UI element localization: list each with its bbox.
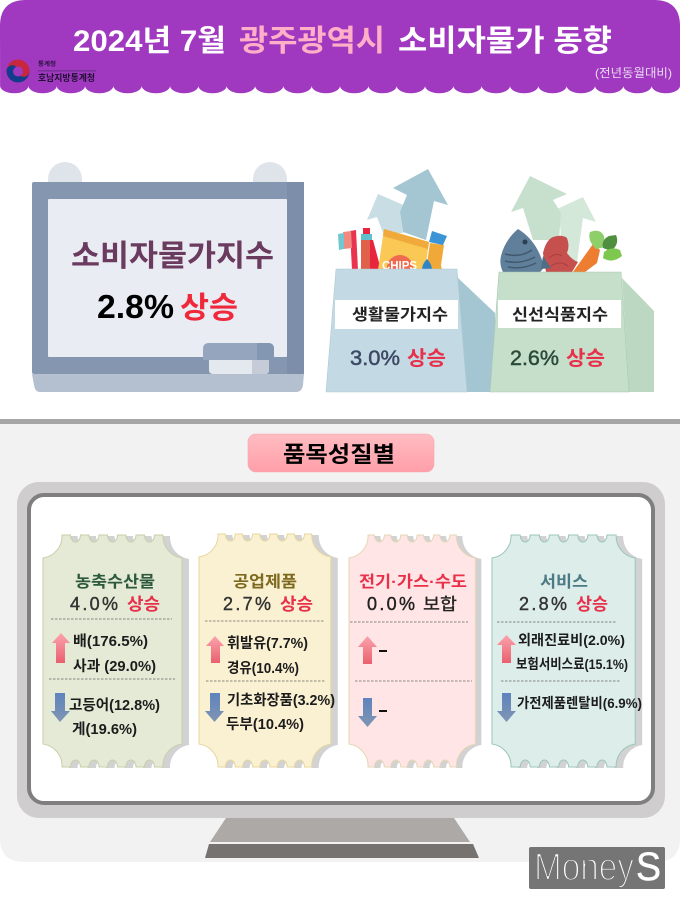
- category value: 0.0%: [367, 594, 415, 614]
- value: 2.8% up: [97, 288, 238, 325]
- panel: fresh food index bag: [490, 176, 654, 392]
- icon: up arrow: [497, 635, 516, 663]
- falling item: 가전제품렌탈비(6.9%): [517, 695, 642, 711]
- category value: 2.8%: [519, 594, 567, 614]
- value: 2.6% up: [510, 347, 605, 370]
- category title: 서비스: [540, 573, 588, 591]
- falling items: 두부(10.4%): [226, 716, 304, 733]
- title: 소비자물가 동향: [398, 25, 612, 58]
- value: 2.6% up: 2.6%: [510, 347, 559, 370]
- icon: down arrow: [497, 693, 516, 722]
- monitor illustration: [17, 482, 665, 858]
- falling items: 고등어(12.8%): [69, 697, 160, 714]
- label box: [498, 300, 621, 328]
- rising items: 외래진료비(2.0%): [518, 632, 625, 648]
- icon: household goods: [338, 228, 447, 269]
- category title: 농축수산물: [75, 573, 155, 591]
- category value: [367, 594, 457, 614]
- falling items: 기초화장품(3.2%): [227, 692, 335, 709]
- label box: [335, 300, 458, 329]
- rising items: none: [379, 650, 387, 652]
- heading: by item category: 품목성질별: [283, 442, 395, 467]
- icon: up arrow: [358, 636, 377, 664]
- category title: 공업제품: [233, 573, 297, 591]
- label text: 생활물가지수: [352, 306, 448, 324]
- category value: 상승: [127, 595, 160, 614]
- panel: agricultural, livestock and fishery products: [43, 535, 189, 768]
- icon: down arrow: [205, 693, 224, 722]
- logo: statistics office: [6, 60, 96, 83]
- panel: living cost index bag: [326, 169, 495, 392]
- icon: fish, meat and carrot: [500, 229, 622, 272]
- icon: rising arrows: [367, 169, 448, 240]
- title: 광주광역시: [239, 25, 385, 58]
- icon: up arrow: [52, 633, 70, 663]
- category value: [70, 594, 160, 614]
- falling items: 게(19.6%): [72, 721, 137, 738]
- rising items: 휘발유(7.7%): [227, 635, 308, 652]
- value: 2.8% up: 상승: [180, 292, 238, 325]
- icon: down arrow: [358, 698, 377, 727]
- icon: rising arrows: [511, 176, 596, 262]
- heading: by item category: [248, 434, 434, 472]
- category value: 4.0%: [70, 594, 118, 614]
- category value: 상승: [280, 595, 313, 614]
- title: 2024년 7월: [73, 25, 226, 58]
- title: [73, 25, 612, 58]
- value: 3.0% up: 3.0%: [350, 347, 400, 370]
- heading: consumer price index: 소비자물가지수: [71, 240, 274, 273]
- label text: 신선식품지수: [512, 306, 608, 324]
- falling items: [69, 697, 160, 738]
- subtitle: year-on-year note: (전년동월대비): [595, 66, 672, 80]
- icon: household goods: CHIPS: [382, 258, 417, 272]
- category value: 2.7%: [223, 594, 271, 614]
- rising items: [227, 635, 308, 677]
- logo: MoneyS watermark: S: [636, 845, 661, 889]
- category value: 상승: [576, 595, 608, 614]
- logo: MoneyS watermark: Money: [534, 846, 634, 889]
- rising items: 배(176.5%): [73, 633, 148, 650]
- category value: [223, 594, 313, 614]
- falling items: [226, 692, 335, 733]
- board eraser: [203, 343, 274, 374]
- category value: [519, 594, 608, 614]
- logo: statistics office: 호남지방통계청: [38, 72, 95, 83]
- falling items: none: [379, 710, 387, 712]
- icon: down arrow: [51, 693, 70, 722]
- value: 3.0% up: [350, 347, 446, 370]
- rising items: 사과 (29.0%): [73, 658, 156, 675]
- panel: services: [492, 535, 642, 768]
- category value: 보합: [423, 595, 457, 614]
- rising items: 경유(10.4%): [227, 660, 299, 677]
- board knobs: [48, 162, 287, 182]
- icon: up arrow: [206, 636, 224, 663]
- panel: consumer price index board: [32, 162, 304, 392]
- value: 2.8% up: 2.8%: [97, 288, 174, 325]
- panel: by item category background: [0, 419, 680, 862]
- header banner: [0, 0, 680, 93]
- panel: industrial products: [199, 534, 338, 768]
- category title: 전기·가스·수도: [359, 573, 467, 591]
- value: 3.0% up: 상승: [407, 347, 446, 370]
- value: 2.6% up: 상승: [566, 347, 605, 370]
- logo: statistics office: 통계청: [38, 60, 56, 68]
- rising items: [73, 633, 156, 675]
- panel: electricity, gas and water: [349, 535, 481, 768]
- rising items: [516, 632, 628, 672]
- rising items: 보험서비스료(15.1%): [516, 656, 628, 672]
